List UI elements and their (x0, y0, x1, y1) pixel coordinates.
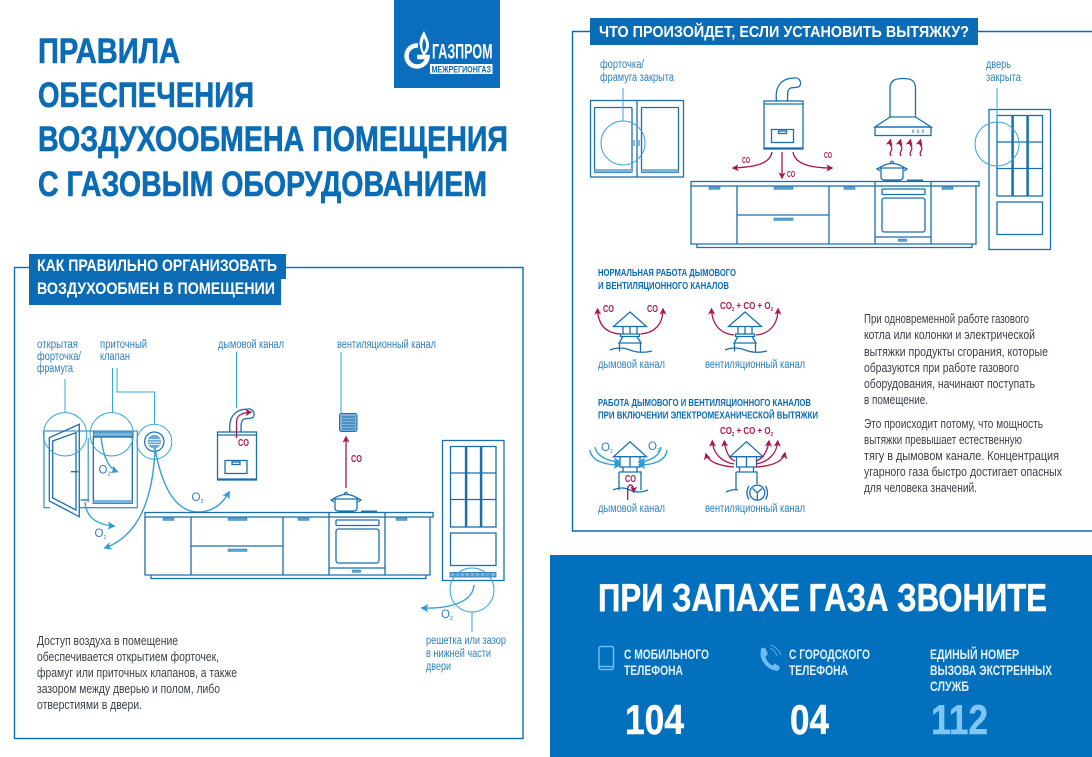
diagram: ventilation duct normal: CO (720, 301, 735, 312)
text block: explanation: вытяжки продукты сгорания, которые (864, 345, 1048, 359)
title: ПРАВИЛА (38, 32, 180, 71)
number: 104: 104 (625, 696, 685, 743)
diagram: flue duct with hood: O (648, 441, 657, 453)
text block: explanation: образуются при работе газового (864, 361, 1019, 375)
text: from landline: ТЕЛЕФОНА (789, 663, 848, 678)
label: open window: фрамуга (37, 363, 73, 375)
panel: how to organize air exchange (14, 254, 523, 738)
label: door grille: решетка или зазор (426, 635, 506, 647)
text: unified emergency number: ЕДИНЫЙ НОМЕР (930, 647, 1019, 662)
arrows: oxygen flow: O (94, 528, 103, 540)
panel heading: ВОЗДУХООБМЕН В ПОМЕЩЕНИИ (37, 280, 275, 298)
arrows: oxygen flow: 2 (103, 535, 106, 541)
label: supply valve: клапан (100, 351, 130, 363)
label: door grille: в нижней части (426, 648, 491, 660)
diagram: ventilation duct normal: + CO + O (734, 301, 771, 312)
text block: air access: Доступ воздуха в помещение (37, 634, 178, 648)
diagram: flue duct with hood: 2 (610, 449, 613, 455)
label: window closed: фрамуга закрыта (600, 72, 674, 84)
label: door closed: дверь (986, 59, 1011, 71)
arrows: oxygen flow: O (98, 464, 107, 476)
text: unified emergency number: ВЫЗОВА ЭКСТРЕННЫХ (930, 663, 1052, 678)
label: open window: открытая (37, 339, 78, 351)
text block: air access: отверстиями в двери. (37, 698, 142, 712)
text: from mobile: ТЕЛЕФОНА (624, 663, 683, 678)
diagram: flue duct with hood: дымовой канал (598, 503, 665, 515)
number: 112: 112 (931, 696, 988, 743)
text: from mobile: С МОБИЛЬНОГО (624, 647, 709, 662)
diagram: flue duct normal: дымовой канал (598, 359, 665, 371)
label: door grille (426, 635, 506, 673)
logo: Gazprom Mezhregiongaz: ГАЗПРОМ (432, 40, 492, 64)
kitchen (691, 161, 979, 248)
icon: boiler with CO arrows: CO (787, 169, 795, 179)
icon: open window with valve (43, 368, 172, 517)
title: ОБЕСПЕЧЕНИЯ (38, 76, 254, 115)
diagram: ventilation duct normal: 2 (771, 307, 773, 313)
title: С ГАЗОВЫМ ОБОРУДОВАНИЕМ (38, 165, 487, 204)
icon: gas boiler (218, 352, 256, 480)
text block: explanation: для человека значений. (864, 481, 977, 495)
text: from landline: С ГОРОДСКОГО (789, 647, 870, 662)
icon: ventilation grille (340, 352, 357, 432)
icon: closed window (590, 88, 684, 177)
text: unified emergency number: СЛУЖБ (930, 679, 969, 694)
icon: landline handset (760, 645, 781, 671)
label: window closed: форточка/ (600, 59, 645, 71)
arrows: oxygen flow (85, 437, 474, 622)
label: supply valve: приточный (100, 339, 147, 351)
diagram: flue duct normal: CO (603, 303, 614, 315)
diagram: ventilation duct with hood: 2 (732, 432, 734, 438)
text: unified emergency number (930, 647, 1052, 694)
icon: boiler with CO arrows (733, 78, 832, 179)
diagram: flue duct normal: CO (647, 303, 658, 315)
label: open window: форточка/ (37, 351, 82, 363)
panel heading: КАК ПРАВИЛЬНО ОРГАНИЗОВАТЬ (37, 257, 277, 275)
text block: air access (37, 634, 237, 712)
icon: kitchen hood (875, 78, 931, 156)
heading: normal operation: И ВЕНТИЛЯЦИОННОГО КАНАЛОВ (598, 281, 729, 292)
panel: what happens with a hood (572, 18, 1092, 531)
label: ventilation duct: вентиляционный канал (337, 339, 436, 351)
diagram: flue duct with hood: 2 (657, 448, 660, 454)
panel heading (29, 254, 286, 305)
label: flue duct: дымовой канал (218, 339, 284, 351)
label: window closed (600, 59, 674, 84)
heading: hood switched on (598, 398, 818, 422)
label: open window (37, 339, 82, 375)
text block: air access: фрамуг или приточных клапанов, а также (37, 666, 237, 680)
icon: boiler with CO arrows: CO (742, 155, 750, 165)
title (38, 32, 508, 204)
text: from landline (789, 647, 870, 678)
arrow: CO to ventilation: CO (351, 453, 362, 465)
icon: mobile phone (599, 646, 614, 670)
panel: emergency numbers (550, 555, 1092, 757)
arrow: CO to ventilation (346, 437, 362, 488)
icon: gas boiler: CO (238, 437, 249, 449)
logo: Gazprom Mezhregiongaz (394, 0, 500, 88)
diagram: flue duct with hood: O (601, 442, 610, 454)
arrows: oxygen flow: 2 (107, 472, 110, 478)
kitchen (145, 492, 433, 578)
label: door closed (986, 59, 1021, 84)
diagram: ventilation duct with hood: вентиляционный канал (705, 503, 805, 515)
text block: explanation (864, 312, 1063, 495)
text block: air access: зазором между дверью и полом, либо (37, 682, 220, 696)
text block: explanation: вытяжки превышает естественную (864, 433, 1022, 447)
diagram: ventilation duct normal: 2 (732, 307, 734, 313)
text block: air access: обеспечивается открытием форточек, (37, 650, 219, 664)
diagram: flue duct normal (598, 303, 665, 371)
text block: explanation: тягу в дымовом канале. Концентрация (864, 449, 1059, 463)
text block: explanation: При одновременной работе газового (864, 312, 1029, 326)
icon: closed door (975, 88, 1050, 250)
label: door closed: закрыта (986, 72, 1021, 84)
diagram: ventilation duct with hood: + CO + O (734, 426, 771, 437)
diagram: ventilation duct normal: вентиляционный канал (705, 359, 805, 371)
title: ВОЗДУХООБМЕНА ПОМЕЩЕНИЯ (38, 120, 508, 159)
diagram: ventilation duct normal (705, 301, 805, 371)
panel heading (590, 18, 978, 45)
diagram: flue duct with hood: CO (625, 473, 636, 485)
diagram: ventilation duct with hood: CO (720, 426, 735, 437)
diagram: ventilation duct with hood: 2 (771, 432, 773, 438)
text block: explanation: оборудования, начинают поступать (864, 377, 1035, 391)
diagram: flue duct with hood (590, 441, 667, 515)
icon: door with grille (442, 440, 504, 632)
heading: normal operation (598, 268, 736, 292)
diagram: ventilation duct with hood (705, 426, 805, 515)
text block: explanation: угарного газа быстро достигает опасных (864, 465, 1063, 479)
logo: Gazprom Mezhregiongaz: МЕЖРЕГИОНГАЗ (432, 64, 491, 74)
icon: boiler with CO arrows: CO (824, 150, 832, 160)
label: door grille: двери (426, 661, 451, 673)
arrows: oxygen flow: 2 (200, 499, 203, 505)
number: 04: 04 (790, 696, 830, 743)
arrows: oxygen flow: 2 (450, 616, 453, 622)
arrows: oxygen flow: O (192, 492, 200, 504)
heading: hood switched on: РАБОТА ДЫМОВОГО И ВЕНТИЛЯЦИОННОГО КАНАЛОВ (598, 398, 811, 409)
text block: explanation: в помещение. (864, 393, 928, 407)
label: supply valve (100, 339, 147, 363)
text block: explanation: Это происходит потому, что мощность (864, 417, 1043, 431)
heading: normal operation: НОРМАЛЬНАЯ РАБОТА ДЫМОВОГО (598, 268, 736, 279)
arrows: oxygen flow: O (441, 609, 450, 621)
heading: hood switched on: ПРИ ВКЛЮЧЕНИИ ЭЛЕКТРОМЕХАНИЧЕСКОЙ ВЫТЯЖКИ (598, 408, 818, 422)
text block: explanation: котла или колонки и электрической (864, 328, 1035, 342)
panel heading: ЧТО ПРОИЗОЙДЕТ, ЕСЛИ УСТАНОВИТЬ ВЫТЯЖКУ? (599, 22, 969, 41)
text: from mobile (624, 647, 709, 678)
